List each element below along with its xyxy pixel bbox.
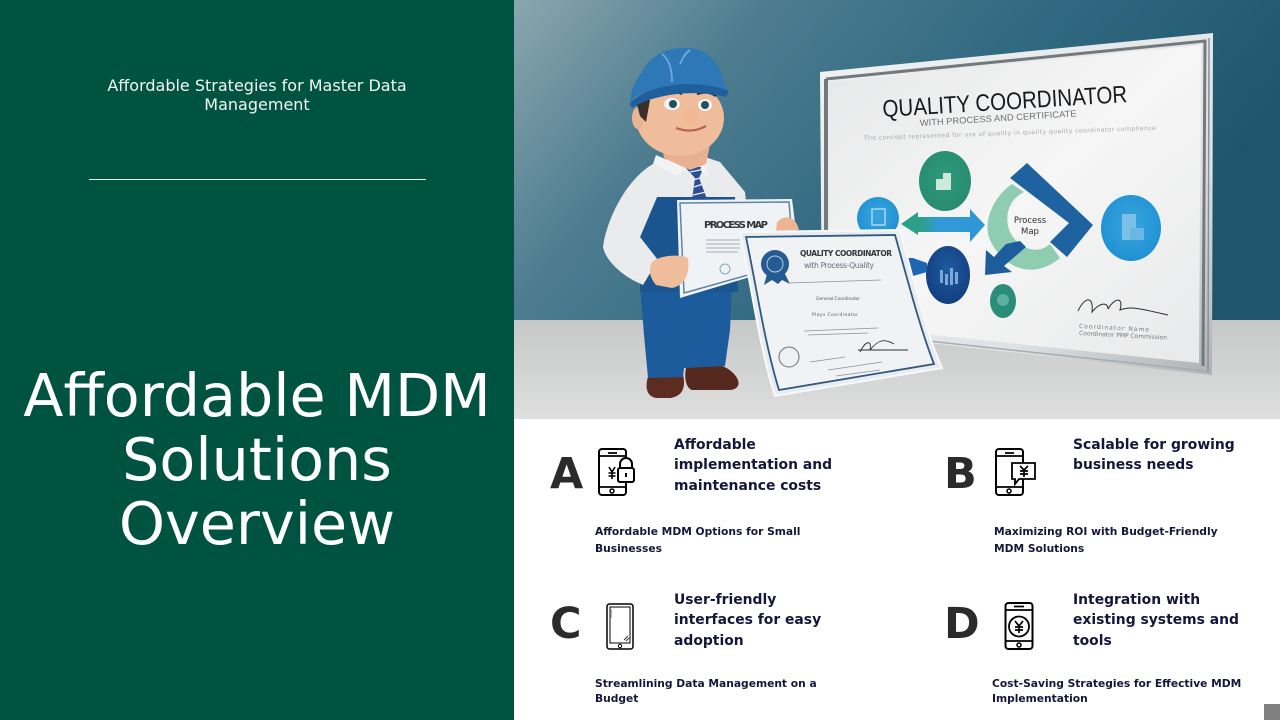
overalls bib — [640, 197, 738, 292]
heading C: User-friendly — [674, 592, 776, 608]
heading B — [1073, 437, 1235, 473]
shirt — [640, 152, 748, 285]
main title: Affordable MDM — [23, 362, 491, 430]
process diagram — [857, 151, 1161, 318]
heading C: interfaces for easy — [674, 612, 821, 628]
item C — [550, 592, 821, 704]
quality coordinator certificate: QUALITY COORDINATOR — [800, 249, 892, 258]
subtitle: Affordable Strategies for Master Data Management — [107, 76, 407, 114]
main title: Solutions — [122, 426, 392, 494]
main title: Overview — [119, 490, 395, 558]
hands — [650, 256, 688, 288]
heading C — [674, 592, 821, 649]
heading B: Scalable for growing — [1073, 437, 1235, 453]
quality coordinator certificate: Plays Coordinator — [812, 312, 858, 318]
neck and face — [660, 135, 712, 170]
floor — [514, 320, 1280, 419]
icon: phone with yen and lock — [598, 448, 635, 496]
trousers — [640, 285, 732, 378]
letter C: C — [550, 599, 582, 649]
heading A: implementation and — [674, 457, 832, 473]
item B — [944, 437, 1235, 554]
heading A: Affordable — [674, 437, 756, 453]
tie — [685, 167, 707, 200]
heading D — [1073, 592, 1239, 649]
framed poster: Coordinator PMP Commission — [1079, 330, 1167, 342]
letter A: A — [550, 449, 583, 499]
corner marker — [1264, 704, 1280, 720]
process diagram: Map — [1021, 227, 1039, 237]
hair — [636, 100, 650, 122]
main title — [23, 362, 491, 558]
panel: green title sidebar — [0, 0, 514, 720]
description B: Maximizing ROI with Budget-Friendly MDM Solutions — [994, 525, 1218, 554]
icon: phone with yen speech bubble — [995, 448, 1036, 496]
illustration: coordinator with certificates — [514, 0, 1280, 419]
arm — [603, 158, 680, 285]
description C: Streamlining Data Management on a Budget — [595, 676, 817, 704]
heading C: adoption — [674, 633, 744, 649]
description A: Affordable MDM Options for Small Businesses — [595, 525, 800, 554]
heading D: existing systems and — [1073, 612, 1239, 628]
quality coordinator certificate: with Process-Quality — [804, 261, 875, 270]
poster subtitle: WITH PROCESS AND CERTIFICATE — [920, 108, 1077, 128]
heading B: business needs — [1073, 457, 1194, 473]
signature — [1078, 300, 1168, 315]
item D — [944, 592, 1241, 704]
character — [603, 48, 942, 398]
framed poster: The concept represented for use of quality in quality quality coordinator compliance — [863, 125, 1156, 142]
item A — [550, 437, 832, 554]
collar — [653, 155, 686, 176]
process map certificate — [677, 199, 800, 298]
framed poster — [820, 33, 1213, 375]
heading A — [674, 437, 832, 494]
quality coordinator certificate — [740, 230, 942, 396]
poster title: QUALITY COORDINATOR — [882, 81, 1128, 123]
shoes — [685, 363, 739, 390]
process map label: Process — [1014, 216, 1047, 226]
heading D: Integration with — [1073, 592, 1200, 608]
heading A: maintenance costs — [674, 478, 821, 494]
quality coordinator certificate: General Coordinator — [816, 296, 860, 302]
letter D: D — [944, 599, 980, 649]
eyes and smile — [664, 98, 680, 110]
wall — [514, 0, 1280, 321]
process map certificate: PROCESS MAP — [704, 220, 768, 231]
letter B: B — [944, 449, 977, 499]
icon: phone with yen coin — [1004, 602, 1034, 650]
icon: smartphone — [606, 603, 634, 650]
hard hat — [630, 48, 729, 104]
heading D: tools — [1073, 633, 1112, 649]
description D: Cost-Saving Strategies for Effective MDM Implementation — [992, 676, 1241, 704]
framed poster: Coordinator Name — [1079, 323, 1149, 334]
